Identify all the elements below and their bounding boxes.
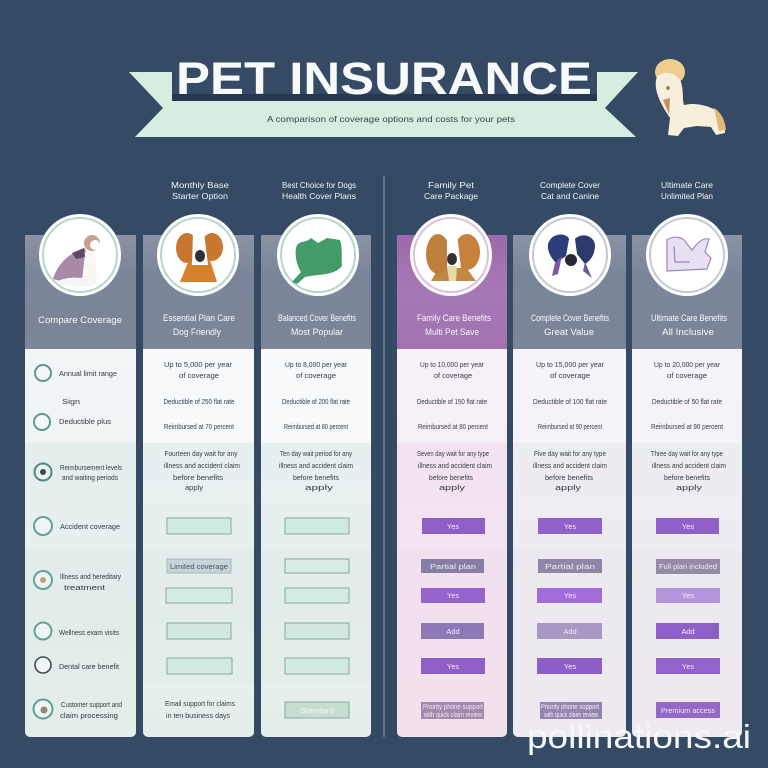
plan details: Up to 8,000 per year <box>285 360 347 369</box>
icon: brown spaniel <box>410 214 492 296</box>
coverage boxes: Yes <box>564 522 576 531</box>
plan details <box>279 360 353 492</box>
plan details: illness and accident claim <box>652 461 726 470</box>
plan details: Five day wait for any type <box>534 449 606 458</box>
plan details: illness and accident claim <box>533 461 607 470</box>
plan details: before benefits <box>664 473 710 482</box>
coverage boxes: Partial plan <box>545 562 595 571</box>
plan details: before benefits <box>293 473 339 482</box>
plan details <box>164 360 240 492</box>
coverage boxes: Add <box>446 627 460 636</box>
coverage boxes <box>421 518 485 719</box>
label: plan 4: Complete Cover <box>540 180 600 190</box>
plan details: Reimbursed at 80 percent <box>284 422 349 431</box>
feature: reimbursement: Reimbursement levels <box>60 463 122 472</box>
plan heading <box>163 313 235 337</box>
feature: accidents <box>34 517 120 535</box>
feature: wellness: Wellness exam visits <box>59 628 119 637</box>
panel: plan 4 <box>513 214 626 737</box>
plan heading <box>417 313 491 337</box>
coverage boxes: Add <box>681 627 695 636</box>
plan heading: Essential Plan Care <box>163 313 235 323</box>
icon: navy eared dog <box>529 214 611 296</box>
feature: illness: treatment <box>64 583 106 592</box>
title shadow band <box>172 94 597 101</box>
coverage boxes: Yes <box>447 522 459 531</box>
divider <box>384 176 385 737</box>
icon: green pet shape <box>277 214 359 296</box>
feature: reimbursement: and waiting periods <box>62 473 118 482</box>
label: plan 5: Ultimate Care <box>661 180 713 190</box>
banner ribbon <box>129 72 638 137</box>
coverage boxes <box>656 518 720 718</box>
coverage boxes: Premium access <box>661 706 715 715</box>
plan details: before benefits <box>545 473 593 482</box>
feature: accidents: Accident coverage <box>60 522 120 531</box>
label: plan 2: Health Cover Plans <box>282 191 356 201</box>
plan details: Reimbursed at 90 percent <box>538 422 603 431</box>
plan heading: Multi Pet Save <box>425 327 479 337</box>
plan details: illness and accident claim <box>418 461 492 470</box>
watermark: pollinations.ai <box>527 719 751 756</box>
plan details: Up to 15,000 per year <box>536 360 604 369</box>
plan details: Deductible of 250 flat rate <box>164 397 234 406</box>
plan details: apply <box>439 483 465 492</box>
coverage boxes: Add <box>563 627 577 636</box>
coverage boxes: Yes <box>447 591 459 600</box>
label: plan 1: Monthly Base <box>171 180 229 190</box>
feature: dental <box>35 657 120 673</box>
title banner <box>129 53 638 137</box>
panel: plan 1 <box>143 214 254 737</box>
feature: deductible: Sign <box>62 397 80 406</box>
coverage boxes: with quick claim review <box>423 712 483 719</box>
coverage boxes: Priority phone support <box>423 704 483 711</box>
plan details: of coverage <box>296 371 336 380</box>
feature: extras: claim processing <box>60 711 118 720</box>
plan details: apply <box>676 483 702 492</box>
plan details: Fourteen day wait for any <box>164 449 238 458</box>
plan details: Seven day wait for any type <box>417 449 489 458</box>
coverage boxes <box>165 518 235 720</box>
feature: illness: Illness and hereditary <box>60 572 121 581</box>
coverage boxes: Standard <box>300 706 334 715</box>
plan details: Ten day wait period for any <box>280 449 352 458</box>
plan details: before benefits <box>429 473 473 482</box>
feature: dental: Dental care benefit <box>59 662 120 671</box>
plan details: of coverage <box>434 371 472 380</box>
plan details: Deductible of 100 flat rate <box>533 397 607 406</box>
plan details: illness and accident claim <box>164 461 240 470</box>
coverage boxes: Email support for claims <box>165 699 235 708</box>
icon: small dog <box>655 59 726 136</box>
icon: orange spaniel <box>157 214 239 296</box>
feature: annual limit: Annual limit range <box>59 369 117 378</box>
plan details <box>651 360 726 492</box>
plan details: Deductible of 200 flat rate <box>282 397 350 406</box>
feature: extras <box>34 700 122 720</box>
panel: features column <box>25 214 136 737</box>
plan details <box>417 360 492 492</box>
label: plan 4 <box>540 180 600 201</box>
label: plan 5: Unlimited Plan <box>661 191 713 201</box>
plan details: apply <box>555 483 581 492</box>
label: plan 1: Starter Option <box>172 191 228 201</box>
panel: plan 2 <box>261 214 371 737</box>
feature: extras: Customer support and <box>61 700 122 709</box>
feature: annual limit <box>35 365 117 381</box>
plan heading <box>278 313 356 337</box>
plan details: Deductible of 150 flat rate <box>417 397 487 406</box>
column header <box>397 235 507 349</box>
coverage boxes: Limited coverage <box>170 562 228 571</box>
plan details: Up to 10,000 per year <box>420 360 484 369</box>
plan heading: Dog Friendly <box>173 327 221 337</box>
feature: wellness <box>34 622 119 640</box>
column header <box>632 235 742 349</box>
column header <box>25 235 136 349</box>
label: plan 1 <box>171 180 229 201</box>
feature: deductible: Deductible plus <box>59 417 111 426</box>
plan heading: Balanced Cover Benefits <box>278 313 356 323</box>
coverage boxes: Yes <box>564 591 576 600</box>
label: plan 4: Cat and Canine <box>541 191 599 201</box>
label: plan 3: Family Pet <box>428 180 475 190</box>
column header <box>261 235 371 349</box>
plan heading: Great Value <box>544 327 594 337</box>
subtitle: A comparison of coverage options and costs for your pets <box>267 114 515 124</box>
coverage boxes: Yes <box>682 522 694 531</box>
icon: lavender pet shape <box>646 214 728 296</box>
coverage boxes: Partial plan <box>430 562 476 571</box>
feature: reimbursement <box>34 463 122 482</box>
label: plan 2 <box>282 180 356 201</box>
label: plan 5 <box>661 180 713 201</box>
plan heading: All Inclusive <box>662 327 714 337</box>
column header <box>513 235 626 349</box>
coverage boxes: Yes <box>564 662 576 671</box>
coverage boxes <box>285 518 349 718</box>
plan details: illness and accident claim <box>279 461 353 470</box>
coverage boxes <box>537 518 602 719</box>
coverage boxes: Full plan included <box>659 562 717 571</box>
plan details: of coverage <box>179 371 219 380</box>
panel: plan 5 <box>632 214 742 737</box>
plan details: of coverage <box>550 371 590 380</box>
plan heading: Most Popular <box>291 327 343 337</box>
title: PET INSURANCE <box>176 53 592 104</box>
icon: pet badge 1 <box>39 214 121 296</box>
column header <box>143 235 254 349</box>
coverage boxes: in ten business days <box>166 711 230 720</box>
panel: plan 3 <box>397 214 507 737</box>
plan heading <box>531 313 609 337</box>
label: plan 2: Best Choice for Dogs <box>282 180 356 190</box>
coverage boxes: Yes <box>447 662 459 671</box>
plan details: of coverage <box>667 371 707 380</box>
plan details: apply <box>305 483 333 492</box>
label: plan 3: Care Package <box>424 191 478 201</box>
coverage boxes: Yes <box>682 591 694 600</box>
plan heading: Family Care Benefits <box>417 313 491 323</box>
plan labels above columns <box>171 180 713 201</box>
heading: Compare Coverage <box>38 315 122 325</box>
plan details: Deductible of 50 flat rate <box>652 397 722 406</box>
coverage boxes: with quick claim review <box>543 712 599 719</box>
plan details <box>533 360 607 492</box>
plan heading: Complete Cover Benefits <box>531 313 609 323</box>
feature: illness <box>34 571 121 592</box>
coverage boxes: Yes <box>682 662 694 671</box>
plan details: Reimbursed at 70 percent <box>164 422 235 431</box>
feature: deductible <box>34 397 111 430</box>
plan heading <box>651 313 727 337</box>
plan details: before benefits <box>173 473 223 482</box>
coverage boxes: Priority phone support <box>541 704 599 711</box>
plan details: Up to 20,000 per year <box>654 360 720 369</box>
plan details: Up to 5,000 per year <box>164 360 232 369</box>
plan details: apply <box>185 483 203 492</box>
plan details: Reimbursed at 90 percent <box>651 422 724 431</box>
plan details: Reimbursed at 80 percent <box>418 422 489 431</box>
plan heading: Ultimate Care Benefits <box>651 313 727 323</box>
label: plan 3 <box>424 180 478 201</box>
plan details: Three day wait for any type <box>651 449 723 458</box>
